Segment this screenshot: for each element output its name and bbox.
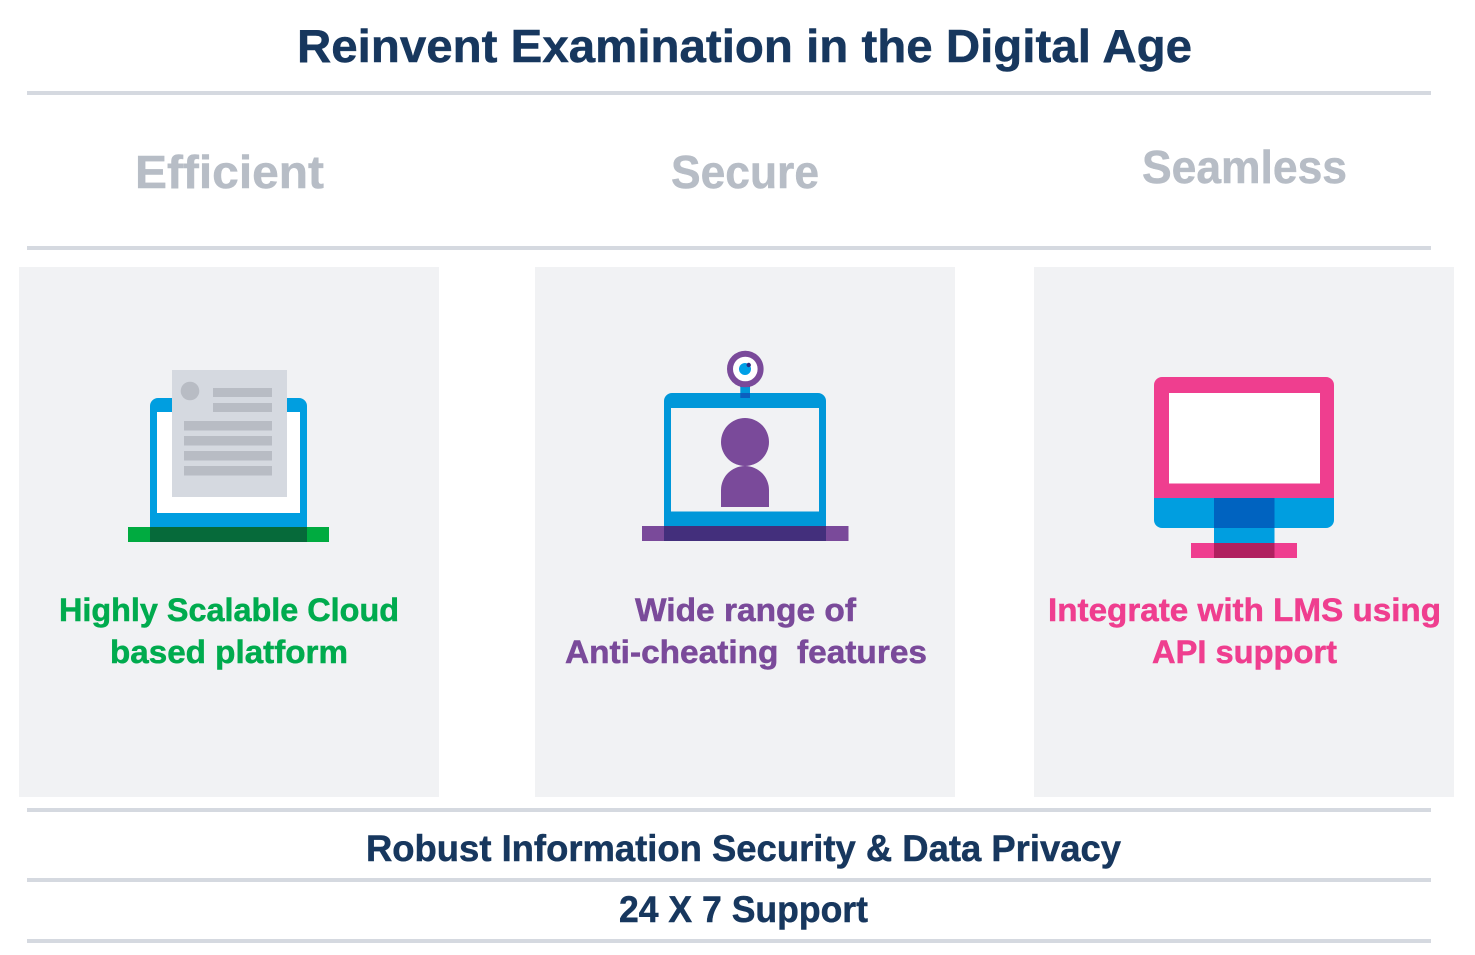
title: Reinvent Examination in the Digital Age xyxy=(297,20,1192,72)
text: efficient caption: Highly Scalable Cloud xyxy=(59,592,399,628)
icon: desktop monitor xyxy=(1154,377,1334,558)
text: efficient caption xyxy=(59,592,399,670)
text: secure caption xyxy=(565,592,927,670)
text: seamless caption xyxy=(1048,592,1441,670)
text: secure caption: Anti-cheating features xyxy=(565,634,927,670)
panel: seamless xyxy=(1034,267,1454,797)
panel: secure xyxy=(535,267,955,797)
icon: laptop with document xyxy=(128,370,329,542)
text: seamless caption: API support xyxy=(1152,634,1337,670)
panel: efficient xyxy=(19,267,439,797)
text: seamless caption: Integrate with LMS using xyxy=(1048,592,1441,628)
text: secure caption: Wide range of xyxy=(635,592,856,628)
icon: laptop with webcam and person xyxy=(642,354,848,541)
text: security banner: Robust Information Security & Data Privacy xyxy=(366,828,1121,869)
heading: Secure: Secure xyxy=(671,146,819,198)
heading: Seamless: Seamless xyxy=(1142,141,1347,193)
text: support banner: 24 X 7 Support xyxy=(619,889,868,930)
heading: Efficient: Efficient xyxy=(135,146,324,198)
text: efficient caption: based platform xyxy=(110,634,348,670)
